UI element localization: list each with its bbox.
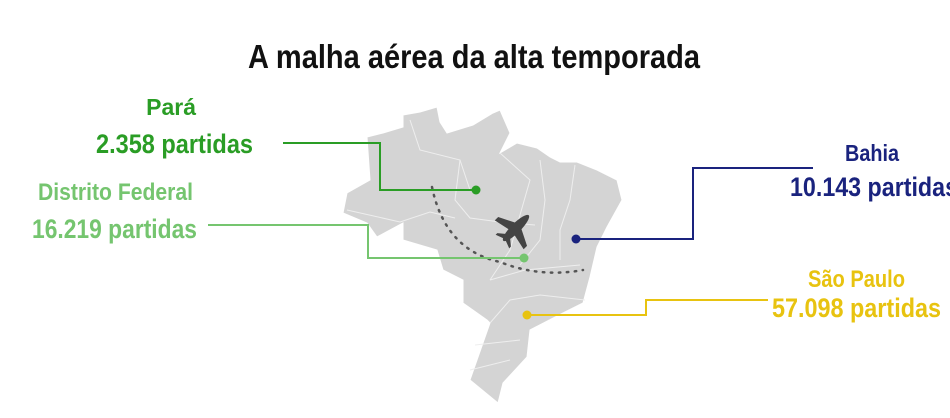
callout: São Paulo: São Paulo xyxy=(808,266,905,293)
title: A malha aérea da alta temporada xyxy=(248,38,701,75)
callout: Pará xyxy=(96,94,480,194)
callout: Bahia xyxy=(572,140,950,244)
flight path dotted xyxy=(432,187,583,273)
callout: Distrito Federal xyxy=(32,179,528,262)
icon: airplane xyxy=(488,201,543,256)
callout: Pará: 2.358 partidas xyxy=(96,129,253,159)
callout: Bahia: Bahia xyxy=(845,140,899,166)
callout: São Paulo xyxy=(522,266,941,323)
callout: Distrito Federal: 16.219 partidas xyxy=(32,214,197,244)
callout: Distrito Federal: Distrito Federal xyxy=(38,179,193,206)
callout: Pará: Pará xyxy=(146,94,196,120)
map: Brazil xyxy=(343,107,622,403)
